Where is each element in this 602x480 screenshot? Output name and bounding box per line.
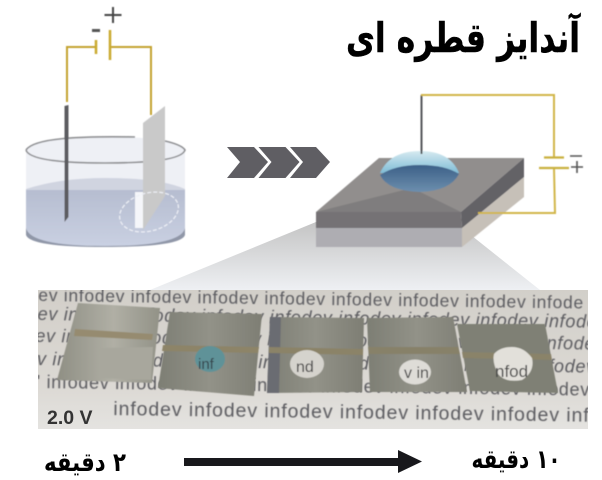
droplet dome — [380, 151, 459, 173]
droplet — [380, 151, 459, 192]
sample 3 — [267, 317, 364, 393]
beaker base — [26, 228, 185, 247]
minus sign — [92, 29, 100, 32]
voltage label: 2.0 V — [47, 407, 93, 429]
label: 2 minutes: ۲ دقیقه — [44, 448, 126, 478]
droplet liquid base — [380, 165, 459, 192]
electrolyte water — [26, 190, 185, 246]
lower layer front — [316, 228, 462, 247]
lower layer side — [462, 177, 524, 247]
sample 4: v in — [404, 365, 429, 382]
cathode electrode — [64, 105, 68, 222]
gray probe wire — [420, 95, 422, 154]
sample 3: nd — [296, 359, 314, 376]
left circuit wire — [67, 47, 151, 115]
process chevrons — [227, 147, 330, 178]
block front face — [316, 212, 462, 228]
anode plate — [143, 106, 165, 230]
time arrow — [184, 450, 422, 473]
label: 10 minutes: ۱۰ دقیقه — [472, 445, 560, 475]
drop anodizing block — [316, 95, 583, 247]
sample 5 — [457, 324, 558, 393]
plate submerged strip — [135, 192, 143, 228]
beaker body — [26, 137, 185, 246]
block top face — [316, 158, 524, 212]
sample 5: nfod — [495, 362, 528, 381]
sample 1 — [57, 303, 160, 383]
irregular hole — [494, 347, 533, 381]
right circuit wire — [421, 95, 555, 213]
battery plates — [96, 30, 110, 60]
infodev printed paper text: ' infodev infodev infodev infodev infodev infodev infodev infodev — [37, 372, 590, 400]
photo of anodized samples — [26, 285, 602, 429]
infodev printed paper text: v infodev infodev infodev infodev infodev infodev infodev infodev — [37, 349, 596, 377]
infodev printed paper text: ev infodev infodev infodev infodev infodev infodev infodev infodev — [38, 304, 602, 332]
infodev printed paper text: ev infodev infodev infodev infodev infodev infodev infodev infodev — [35, 326, 602, 354]
beaker rim — [26, 137, 185, 163]
dashed anodized area — [115, 186, 183, 238]
photo background — [38, 290, 588, 429]
sample 2: inf — [198, 356, 215, 373]
block side face — [461, 158, 524, 228]
sample 2 — [158, 312, 262, 396]
plus sign — [104, 7, 122, 23]
sample 4 — [367, 317, 467, 392]
hole — [290, 350, 324, 378]
hole — [399, 360, 431, 384]
zoom beam from block to photo — [150, 222, 540, 290]
water back surface — [26, 178, 185, 195]
minus and plus signs — [570, 156, 583, 173]
hole with teal reflection — [195, 346, 225, 372]
infodev printed paper text: dev infodev infodev infodev infodev infodev infodev infodev infode — [28, 285, 584, 313]
infodev printed paper text — [38, 290, 588, 422]
beaker electrolysis diagram — [26, 7, 185, 247]
top shaded triangle — [316, 188, 461, 212]
right battery plates — [539, 158, 569, 168]
